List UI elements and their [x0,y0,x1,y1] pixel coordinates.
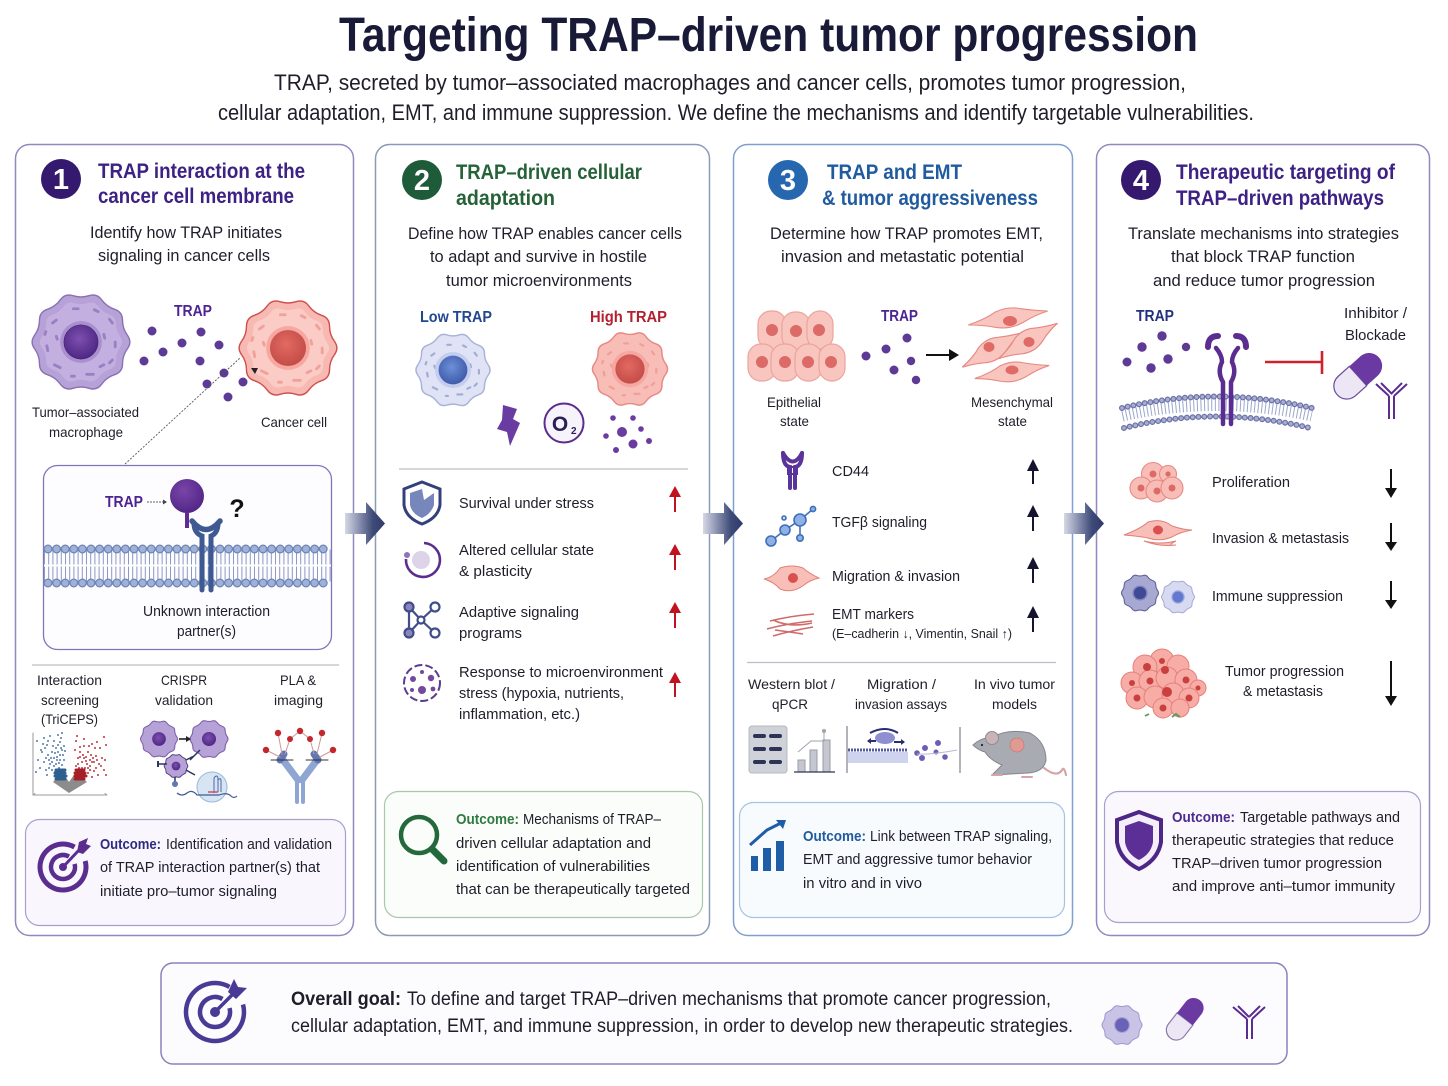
illustration: CRISPR validation [140,721,237,802]
description 1: Identify how TRAP initiates [90,223,282,242]
icon: cancer cell [239,301,337,395]
icon: cell cluster [1130,462,1183,502]
illustration: epithelial cells [748,311,845,381]
label: macrophage: Tumor–associated [32,404,139,420]
method labels: invasion assays [855,696,947,712]
effect: tumor progression: & metastasis [1243,683,1323,700]
step number 3: 3 [780,165,796,197]
description 3 [770,224,1043,266]
icon: invasive cell [1124,521,1192,546]
question mark: ? [229,495,245,523]
red up arrow [669,544,681,570]
method labels: CRISPR [161,672,207,688]
label: macrophage [32,404,139,440]
icon: immune cells [1121,575,1159,611]
receptor [192,521,220,590]
label: unknown partners: partner(s) [177,623,236,640]
arrow: EMT transition [926,349,959,361]
panel 3: TRAP and EMT [734,144,1072,936]
item: microenvironment response [404,664,664,723]
method labels: Migration / [867,676,936,692]
label: TRAP: TRAP [174,303,212,320]
item: migration and invasion [764,566,960,591]
label: cancer cell: Cancer cell [261,414,327,430]
icon: low TRAP cell [416,334,490,406]
icon: rising bars [750,820,786,871]
label: High TRAP: High TRAP [590,309,667,326]
outcome box 1 [26,820,346,926]
label: macrophage: macrophage [49,424,123,440]
label: epithelial state: Epithelial [767,394,821,410]
goal text: Overall goal: [291,989,401,1010]
outcome text 4: Targetable pathways and [1240,809,1400,826]
zoom callout line [125,358,258,464]
receptor with TRAP [1208,336,1246,424]
icon: pill [1162,994,1208,1044]
label: mesenchymal state [971,394,1053,429]
method labels [37,672,323,727]
heading 1: cancer cell membrane [98,185,294,208]
illustration: qPCR bar chart [794,729,835,772]
arrow: panel 2 to 3 [703,502,743,545]
item: TGF-beta signaling: TGFβ signaling [832,514,927,531]
illustration: mouse with tumor [973,731,1066,777]
step number 4: 4 [1133,165,1149,197]
outcome text 1 [100,836,332,900]
outcome text 3: Outcome: [803,828,866,845]
membrane bilayer [44,549,331,583]
label: Low TRAP: Low TRAP [420,309,492,326]
heading 4: TRAP–driven pathways [1176,187,1384,210]
step number 1: 1 [53,164,69,196]
icon: network [404,602,440,638]
illustration: mesenchymal cells [957,301,1063,388]
method labels: qPCR [772,696,808,712]
icon: microenvironment [404,665,440,701]
item: adaptive signaling: programs [459,625,522,642]
outcome text 2: Outcome: [456,811,519,828]
outcome text 3: EMT and aggressive tumor behavior [803,851,1032,868]
item: EMT markers: EMT markers [832,606,914,623]
step number 2 [402,160,442,200]
effect: invasion: Invasion & metastasis [1212,530,1349,547]
step number 4 [1121,160,1161,200]
black up arrow [1027,505,1039,531]
black down arrow [1385,469,1397,498]
description 4: Translate mechanisms into strategies [1128,224,1399,243]
illustration: western blot [749,726,787,773]
label: inhibitor / blockade: Inhibitor / [1344,305,1408,322]
method labels: screening [41,692,99,708]
outcome box 2 [384,792,702,918]
step number 2: 2 [414,165,430,197]
item: microenvironment response: stress (hypoxia, nutrients, [459,685,624,702]
outcome text 1: Identification and validation [166,836,332,853]
icon: oxygen: O [552,413,568,436]
item: CD44: CD44 [832,463,869,480]
icon: antibody [1376,383,1407,419]
item: adaptive signaling [404,602,579,642]
heading 2: TRAP–driven cellular [456,161,642,184]
outcome text 4: Outcome: [1172,809,1235,826]
black up arrow [1027,459,1039,484]
description 1: signaling in cancer cells [98,246,270,265]
description 4: and reduce tumor progression [1153,271,1375,290]
icon: oxygen [544,404,584,442]
TRAP label with arrow: TRAP [105,494,143,511]
method labels: validation [155,692,213,708]
panel 4: therapeutic targeting [1096,144,1430,936]
description 1 [90,223,282,265]
label: epithelial state [767,394,821,429]
label: inhibitor / blockade [1344,305,1408,344]
method labels: PLA & [280,672,317,688]
illustration: migration assay [848,729,957,763]
item: altered cellular state: Altered cellular state [459,542,594,559]
method labels: In vivo tumor [974,676,1055,692]
black down arrow [1385,581,1397,609]
icon: TGF-beta molecule [766,506,816,546]
heading 3: TRAP and EMT [827,161,962,184]
icon: high TRAP cell [592,333,668,405]
subtitle [218,70,1254,125]
outcome text 3: in vitro and in vivo [803,875,922,892]
icon: oxygen: 2 [571,426,577,437]
step number 3 [768,160,808,200]
outcome text 1: Outcome: [100,836,161,853]
item: CD44 [783,453,869,488]
red up arrow [669,672,681,697]
description 2: Define how TRAP enables cancer cells [408,224,682,243]
item: altered cellular state [404,542,594,580]
label: mesenchymal state: state [998,413,1027,429]
description 3: Determine how TRAP promotes EMT, [770,224,1043,243]
effect: tumor progression [1121,649,1344,718]
method labels: (TriCEPS) [41,711,98,727]
effect: proliferation [1130,462,1183,502]
effect: immune suppression: Immune suppression [1212,588,1343,605]
label: unknown partners: Unknown interaction [143,603,270,620]
icon: shield [404,482,440,524]
arrow: panel 3 to 4 [1064,502,1104,545]
heading 3: & tumor aggressiveness [822,187,1038,210]
outcome box 4 [1104,792,1420,922]
outcome text 4: TRAP–driven tumor progression [1172,855,1382,872]
item: microenvironment response: Response to microenvironment [459,664,664,681]
effect: tumor progression: Tumor progression [1225,663,1344,680]
curved membrane [1122,396,1312,428]
panel 4: therapeutic targeting: Proliferation [1212,474,1290,491]
description 2: tumor microenvironments [446,271,632,290]
icon: cell [1102,1006,1142,1044]
outcome text 2: that can be therapeutically targeted [456,881,690,898]
icon: pill [1328,348,1388,404]
outcome text 3: Link between TRAP signaling, [870,828,1052,845]
heading 3 [822,161,1038,210]
arrow: panel 1 to 2 [345,502,385,545]
icon: antibody [1233,1006,1265,1039]
outcome text 2 [456,811,690,898]
label: unknown partners [143,603,270,640]
outcome text 4 [1172,809,1400,895]
subtitle: TRAP, secreted by tumor–associated macrophages and cancer cells, promotes tumor progression, [274,70,1186,95]
method labels: Interaction [37,672,102,688]
heading 4 [1176,161,1396,210]
description 4: that block TRAP function [1171,247,1355,266]
heading 4: Therapeutic targeting of [1176,161,1396,184]
panel 1: TRAP interaction at the cancer cell membrane [16,144,354,936]
chart: volcano plot [33,733,107,795]
secreted TRAP particles [603,415,652,453]
black down arrow [1385,523,1397,551]
label: mesenchymal state: Mesenchymal [971,394,1053,410]
heading 2: adaptation [456,187,555,210]
heading 1: TRAP interaction at the [98,160,305,183]
label: TRAP: TRAP [1136,308,1174,325]
illustration: PLA imaging [263,728,336,802]
outcome text 4: therapeutic strategies that reduce [1172,832,1394,849]
outcome text 1: of TRAP interaction partner(s) that [100,859,321,876]
icon: stress bolt [497,405,520,446]
outcome box 3 [740,802,1064,918]
label: inhibitor / blockade: Blockade [1345,327,1406,344]
outcome text 2: Mechanisms of TRAP– [523,811,662,828]
method labels: models [992,696,1037,712]
method labels: imaging [274,692,323,708]
method labels: Western blot / [748,676,835,692]
item: altered cellular state: & plasticity [459,563,532,580]
goal text: cellular adaptation, EMT, and immune suppression, in order to develop new therapeutic strategies. [291,1016,1073,1037]
icon: plasticity [404,543,440,577]
step number 1 [41,159,81,199]
item: TGF-beta signaling [766,506,927,546]
outcome text 4: and improve anti–tumor immunity [1172,878,1395,895]
label: epithelial state: state [780,413,809,429]
description 2: to adapt and survive in hostile [430,247,647,266]
outcome text 3 [803,828,1052,892]
outcome text 1: initiate pro–tumor signaling [100,883,277,900]
item: survival under stress: Survival under stress [459,495,594,512]
black down arrow [1385,661,1397,706]
icon: target [40,838,91,890]
red up arrow [669,486,681,512]
icon: fibers [767,614,814,636]
description 3: invasion and metastatic potential [781,247,1024,266]
effect: immune suppression [1121,575,1343,613]
overall goal banner [161,963,1287,1064]
inhibition symbol [1265,351,1322,374]
effect: invasion [1124,521,1349,547]
goal text: To define and target TRAP–driven mechanisms that promote cancer progression, [407,989,1051,1010]
item: EMT markers [767,606,1012,641]
title: Targeting TRAP–driven tumor progression [339,9,1198,62]
item: adaptive signaling: Adaptive signaling [459,604,579,621]
icon: shield [1117,812,1161,869]
description 2 [408,224,682,290]
icon: tumor-associated macrophage [32,295,130,389]
item: microenvironment response: inflammation, etc.) [459,706,580,723]
description 4 [1128,224,1399,290]
TRAP particles [862,334,920,384]
label: TRAP: TRAP [881,308,918,325]
icon: CD44 receptor [783,453,802,488]
heading 2 [456,161,642,210]
item: survival under stress [404,482,594,524]
subtitle: cellular adaptation, EMT, and immune suppression. We define the mechanisms and identify targetable vulnerabilities. [218,100,1254,125]
black up arrow [1027,557,1039,583]
TRAP protein [170,479,204,528]
icon: target [186,979,247,1041]
item: EMT markers: (E–cadherin ↓, Vimentin, Snail ↑) [832,627,1012,641]
outcome text 2: driven cellular adaptation and [456,835,651,852]
black up arrow [1027,606,1039,632]
inset: membrane interaction [44,466,332,650]
icon: magnifier [401,817,444,861]
icon: migrating cell [764,566,819,591]
red up arrow [669,602,681,628]
panel 2: TRAP-driven cellular adaptation [376,144,710,936]
heading 1 [98,160,305,208]
icon: tumor mass [1121,649,1206,718]
goal text [291,989,1073,1037]
TRAP particles [1122,331,1190,373]
TRAP particles [140,326,248,402]
method labels [748,676,1055,712]
item: migration and invasion: Migration & invasion [832,568,960,585]
outcome text 2: identification of vulnerabilities [456,858,650,875]
